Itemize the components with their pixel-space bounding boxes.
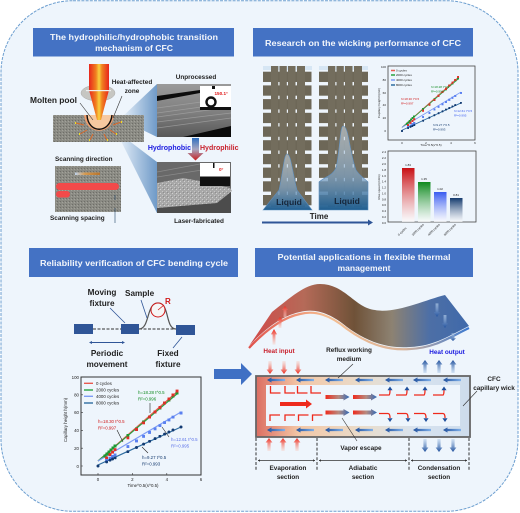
label: scanning direction: Scanning direction — [55, 156, 113, 163]
fit labels: h=18.28 t^0.5 — [138, 390, 165, 395]
fit labels: h=18.30 t^0.5 — [401, 97, 420, 101]
label: evaporation section: Evaporation — [270, 465, 307, 472]
y ticks: 100 — [72, 375, 80, 380]
pointer: molten pool — [80, 103, 93, 120]
fit labels: R²=0.997 — [98, 426, 117, 430]
axis ticks: 80 — [383, 78, 386, 82]
axis ticks: 6 — [474, 141, 476, 145]
section dividers and spans — [256, 438, 469, 471]
heading: hydrophilic/hydrophobic transition mechanism — [33, 28, 234, 56]
label: periodic movement: movement — [87, 360, 128, 369]
x ticks: 2 — [131, 477, 134, 482]
pointer: reflux medium — [338, 364, 353, 378]
legend: 4000 cycles — [96, 394, 120, 399]
pointer: capillary wick — [463, 391, 477, 406]
condensation arrows, down — [388, 418, 447, 422]
label: unprocessed: Unprocessed — [176, 74, 216, 81]
axis ticks: 40 — [383, 103, 386, 107]
connecting arrow — [214, 363, 252, 385]
evaporation vapor turns — [270, 386, 322, 421]
label: heat-affected zone — [112, 79, 152, 95]
pipe shell and wick — [256, 376, 470, 437]
heat output arrows — [422, 360, 456, 373]
chart: capillary height, small — [377, 65, 476, 147]
heading: potential applications — [255, 248, 473, 277]
fit labels: h=12.61 t^0.5 — [171, 437, 198, 442]
condensation turns, bottom — [379, 414, 445, 418]
main vapor arrow — [280, 400, 312, 408]
label: vapor escape: Vapor escape — [340, 445, 382, 452]
legend: 2000 cycles — [96, 388, 120, 392]
legend — [391, 68, 412, 87]
y ticks: 2.2 — [382, 156, 386, 160]
inset: contact angle 0°: 0° — [219, 167, 224, 172]
axis ticks: 4 — [450, 141, 452, 145]
heading: hydrophilic/hydrophobic transition mechanism: mechanism of CFC — [95, 43, 173, 53]
axis title: Time^0.5(s^0.5) — [420, 143, 442, 147]
y ticks: 80 — [74, 392, 80, 398]
fit labels: h=9.27 t^0.5 — [433, 123, 450, 127]
fit labels: R²=0.996 — [138, 396, 157, 402]
label: heat output: Heat output — [429, 349, 466, 356]
legend: 0 cycles — [396, 68, 407, 72]
label: hydrophobic: Hydrophobic — [148, 145, 191, 152]
SEM image: laser-fabricated — [157, 162, 232, 213]
label: moving fixture: Moving — [88, 288, 116, 297]
time arrow — [262, 220, 373, 226]
y ticks — [382, 150, 386, 225]
y ticks: 0.8 — [382, 198, 386, 202]
wick reflux arrows, top — [267, 377, 461, 383]
label: evaporation section: section — [277, 474, 299, 481]
y ticks: 0 — [77, 464, 80, 469]
fit labels — [98, 390, 198, 466]
label: reflux working medium: Reflux working — [326, 347, 372, 354]
axis tick marks — [81, 377, 167, 475]
heat input arrows, bottom — [266, 438, 300, 451]
bars — [402, 168, 462, 222]
label: liquid: Liquid — [276, 197, 302, 207]
blue projection fans — [116, 84, 157, 213]
label: condensation section — [418, 465, 460, 481]
periodic movement arrow — [89, 341, 125, 344]
label: liquid: Liquid — [334, 196, 360, 206]
pointer: fixed fixture — [173, 337, 182, 348]
y ticks: 1.6 — [382, 174, 386, 178]
inset: contact angle 150.1°: 150.1° — [214, 91, 228, 96]
label: periodic movement: Periodic — [91, 349, 124, 358]
heat output arrows, bottom — [422, 439, 456, 452]
x labels: 2000 cycles — [411, 222, 425, 237]
fit labels: h=12.61 t^0.5 — [454, 109, 473, 113]
x ticks: 4 — [166, 477, 169, 482]
label: periodic movement — [87, 349, 128, 369]
sample curve — [139, 303, 176, 329]
label: laser-fabricated: Laser-fabricated — [174, 218, 224, 225]
x ticks: 6 — [200, 477, 203, 482]
label: fixed fixture: Fixed — [157, 349, 179, 358]
y axis title: Capillary height h(mm) — [63, 397, 68, 442]
label: scanning spacing: Scanning spacing — [50, 215, 105, 222]
fit labels: R²=0.997 — [401, 102, 414, 106]
pointer: moving fixture — [110, 308, 125, 323]
bar values — [405, 163, 459, 197]
label: adiabatic section: Adiabatic — [349, 465, 378, 472]
label: heat-affected zone: zone — [125, 88, 140, 95]
heading: wicking performance: Research on the wicking performance of CFC — [265, 38, 461, 48]
label: adiabatic section — [349, 465, 378, 481]
label: hydrophilic: Hydrophilic — [200, 145, 239, 152]
label: reflux working medium: medium — [337, 356, 362, 363]
weave: later time — [319, 66, 368, 210]
y ticks: 0.2 — [382, 215, 386, 219]
heading: wicking performance — [253, 28, 473, 56]
y ticks: 0.4 — [382, 209, 386, 213]
fit labels: h=18.28 t^0.5 — [431, 85, 450, 89]
heat pipe — [256, 376, 470, 437]
legend — [84, 381, 120, 406]
bar values: 1.83 — [405, 163, 411, 167]
label: fixed fixture — [155, 349, 181, 369]
axis ticks — [381, 65, 476, 145]
label: condensation section: Condensation — [418, 465, 460, 472]
label: evaporation section — [270, 465, 307, 481]
panel: bending test diagram — [74, 288, 195, 369]
label: condensation section: section — [428, 474, 450, 481]
heading: reliability verification — [29, 248, 238, 277]
axis ticks: 100 — [381, 65, 386, 69]
label: moving fixture — [88, 288, 116, 308]
x labels: 0 cycles — [397, 226, 408, 237]
heading: potential applications: management — [337, 263, 391, 273]
y ticks: 0.0 — [382, 221, 386, 225]
x labels: 4000 cycles — [427, 222, 441, 237]
label: heat-affected zone: Heat-affected — [112, 79, 152, 86]
axis ticks: 2 — [425, 141, 427, 145]
x ticks: 0 — [97, 477, 100, 482]
fit labels: R²=0.993 — [142, 462, 161, 466]
pointers — [117, 403, 169, 453]
label: reflux working medium — [326, 347, 372, 363]
y ticks — [72, 375, 80, 469]
label: moving fixture: fixture — [89, 299, 115, 308]
legend: 8000 cycles — [396, 83, 412, 87]
panel: wicking weaves — [262, 66, 373, 226]
pointer: heat-affected zone — [113, 96, 122, 118]
fit labels: h=9.27 t^0.5 — [142, 455, 167, 460]
dashed track — [93, 328, 176, 330]
y ticks: 40 — [74, 428, 80, 433]
fit labels: R²=0.995 — [171, 444, 190, 448]
label: fixed fixture: fixture — [155, 360, 181, 369]
y axis title: Rise speed (mm/s) — [377, 174, 381, 200]
y ticks: 1.8 — [382, 168, 386, 172]
x labels: 8000 cycles — [443, 222, 457, 237]
SEM image: unprocessed — [157, 84, 231, 137]
y ticks: 60 — [74, 410, 80, 415]
vapor core — [266, 385, 460, 426]
x labels — [397, 222, 457, 237]
flexible sheet — [249, 284, 469, 349]
label: adiabatic section: section — [352, 474, 374, 481]
data series — [402, 77, 461, 131]
wick reflux arrows, bottom — [267, 427, 461, 433]
sample block with molten pool — [53, 115, 144, 142]
condensation arrows, up — [388, 387, 446, 390]
y ticks: 0.6 — [382, 203, 386, 207]
fit labels: R²=0.996 — [431, 90, 444, 94]
label: heat input: Heat input — [263, 348, 295, 355]
panel: laser mechanism — [30, 64, 239, 225]
heat arrows on sheet — [271, 303, 456, 345]
fit labels: R²=0.995 — [454, 114, 467, 118]
fit labels — [401, 85, 473, 132]
fit labels: R²=0.993 — [433, 128, 446, 132]
axis ticks: 0 — [401, 141, 403, 145]
laser beam and lens — [81, 64, 115, 120]
y ticks: 1.0 — [382, 192, 386, 196]
bar values: 0.81 — [453, 193, 459, 197]
label: time: Time — [310, 212, 329, 221]
y ticks: 2.0 — [382, 162, 386, 166]
label: CFC capillary wick: CFC — [487, 376, 501, 383]
label: CFC capillary wick — [473, 376, 515, 392]
legend: 0 cycles — [96, 381, 113, 386]
axis title y: Capillary height h(mm) — [377, 88, 381, 118]
y ticks: 1.4 — [382, 180, 386, 184]
legend: 8000 cycles — [96, 400, 120, 406]
y ticks: 2.4 — [382, 150, 386, 154]
adiabatic vapor arrows — [326, 394, 377, 416]
y ticks: 20 — [74, 446, 80, 451]
fixtures — [74, 324, 195, 335]
bending radius circle: R — [165, 297, 171, 306]
heading: hydrophilic/hydrophobic transition mechanism: The hydrophilic/hydrophobic transition — [50, 32, 218, 42]
weave: early time — [263, 66, 312, 210]
axis ticks: 60 — [383, 91, 386, 95]
label: CFC capillary wick: capillary wick — [473, 385, 515, 392]
pointer: sample — [141, 300, 147, 318]
x axis title: Time^0.5(s^0.5) — [127, 483, 159, 488]
chart: capillary height, large — [63, 375, 203, 488]
x ticks — [97, 477, 203, 482]
heading: reliability verification: Reliability verification of CFC bending cycle — [40, 258, 228, 268]
chart: bar chart — [377, 150, 476, 237]
legend: 2000 cycles — [396, 73, 412, 77]
heading: potential applications: Potential applications in flexible thermal — [278, 252, 450, 262]
transition arrow — [188, 138, 204, 160]
y ticks: 1.2 — [382, 186, 386, 190]
bar values: 1.02 — [437, 187, 443, 191]
legend: 4000 cycles — [396, 78, 412, 82]
label: sample: Sample — [125, 289, 155, 298]
bar values: 1.35 — [421, 177, 427, 181]
label: molten pool: Molten pool — [30, 95, 77, 105]
heat input arrows — [267, 361, 301, 374]
pointer: vapor escape — [342, 418, 357, 441]
axis ticks: 20 — [383, 116, 386, 120]
condensation turns, top — [379, 390, 444, 395]
scanning diagram — [55, 166, 121, 223]
fit labels: h=18.30 t^0.5 — [98, 419, 125, 424]
data series — [98, 391, 181, 466]
axis ticks: 0 — [384, 129, 386, 133]
